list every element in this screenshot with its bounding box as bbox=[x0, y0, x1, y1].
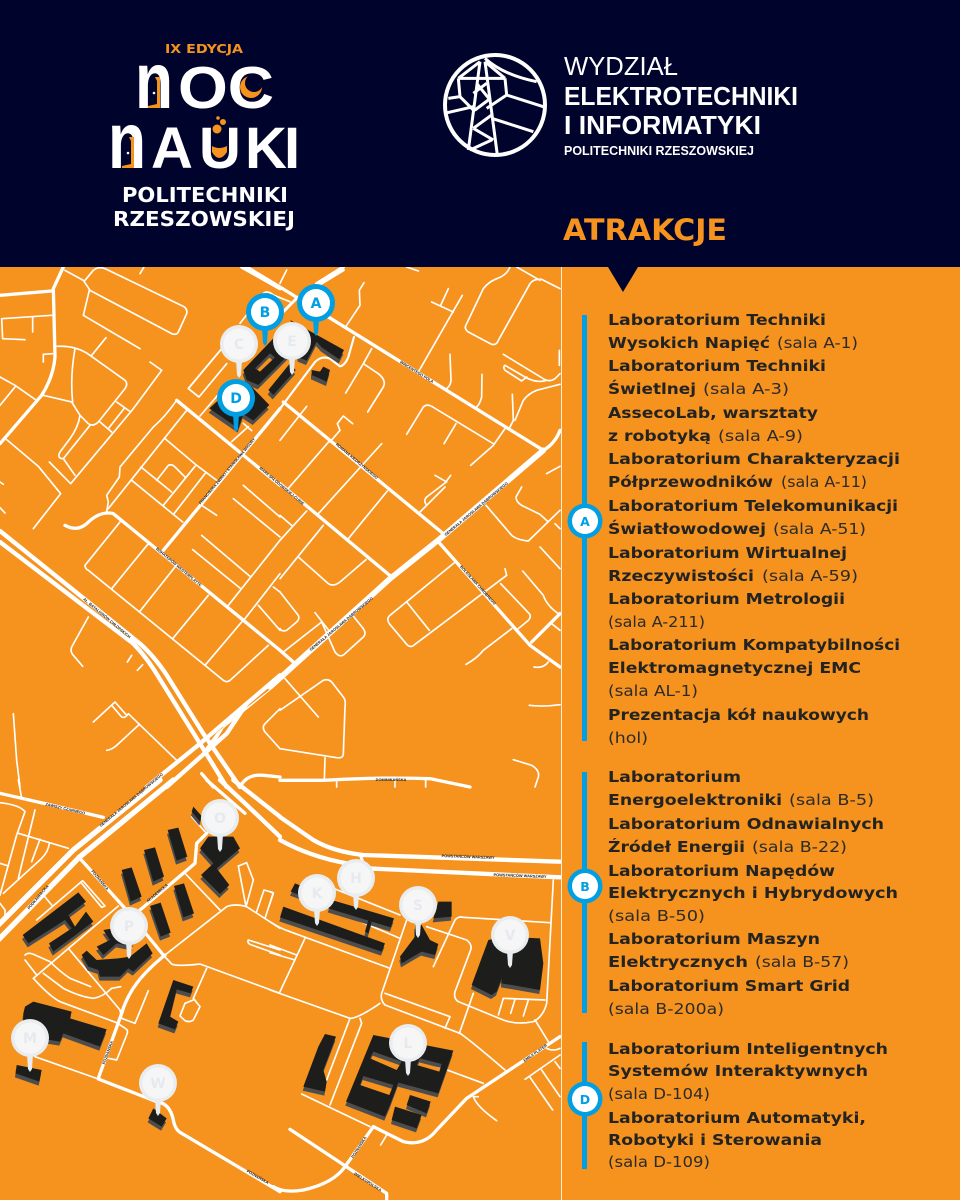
list: building A attractions: (sala A-11) bbox=[781, 473, 867, 491]
list: building A attractions: Laboratorium Techniki bbox=[608, 357, 826, 375]
list: building A attractions: (sala A-51) bbox=[773, 520, 866, 538]
heading: attractions: ATRAKCJE bbox=[563, 213, 727, 247]
map pin: H bbox=[337, 859, 375, 910]
street names: FRANCISZKA ŻWIRKI I STANISŁAWA WIGURY bbox=[198, 436, 256, 505]
street names: GENERAŁA JAROSŁAWA DĄBROWSKIEGO bbox=[443, 481, 509, 537]
list: building A attractions: Światłowodowej bbox=[608, 519, 766, 538]
timeline A bbox=[568, 315, 602, 741]
list: building A attractions: (sala A-9) bbox=[718, 427, 803, 445]
roads: north-east section bbox=[247, 267, 560, 787]
timeline D bbox=[568, 1042, 602, 1169]
icon: power pylon in circle bbox=[445, 55, 545, 155]
list: building A attractions: Laboratorium Telekomunikacji bbox=[608, 497, 898, 515]
list: building B attractions: Laboratorium bbox=[608, 768, 741, 786]
list: building B attractions: (sala B-200a) bbox=[608, 1000, 724, 1018]
street names: GENERAŁA JAROSŁAWA DĄBROWSKIEGO bbox=[308, 596, 374, 652]
map pin: M: M bbox=[23, 1031, 37, 1047]
list: building B attractions: Źródeł Energii bbox=[608, 837, 745, 856]
list: building A attractions: (sala A-211) bbox=[608, 613, 705, 631]
list: building A attractions: z robotyką bbox=[608, 427, 711, 445]
event logo: Noc Nauki: AUKI bbox=[151, 116, 300, 181]
faculty name: POLITECHNIKI RZESZOWSKIEJ bbox=[564, 144, 754, 158]
map pin: P bbox=[110, 907, 148, 959]
event logo: Noc Nauki: n bbox=[108, 96, 146, 185]
map pin: K bbox=[298, 874, 336, 926]
map pin: W bbox=[139, 1064, 177, 1116]
map pin: H: H bbox=[350, 871, 362, 887]
list: building B attractions: Laboratorium Maszyn bbox=[608, 930, 820, 948]
map pin: A bbox=[297, 284, 335, 336]
faculty name bbox=[564, 51, 798, 158]
map pin: M bbox=[11, 1019, 49, 1072]
map pin: L bbox=[389, 1024, 427, 1076]
street names: PODKARPACKA bbox=[26, 884, 50, 910]
list: building A attractions: Półprzewodników bbox=[608, 473, 773, 491]
list: building B attractions: Elektrycznych i Hybrydowych bbox=[608, 884, 898, 902]
street names: ROMANA KIEDRZYŃSKIEGO bbox=[335, 442, 379, 480]
list: building A attractions: Rzeczywistości bbox=[608, 567, 754, 585]
list: building A attractions: Świetlnej bbox=[608, 379, 696, 398]
list: building A attractions bbox=[608, 311, 900, 747]
event logo: Noc Nauki: IX EDYCJA bbox=[165, 41, 243, 56]
street names: BOLESŁAWA CHROBREGO bbox=[459, 564, 497, 606]
list: building B attractions: (sala B-50) bbox=[608, 907, 705, 925]
street names: AKADEMICKA bbox=[145, 882, 169, 903]
street names: ZAWISZY CZARNEGO bbox=[45, 802, 86, 816]
list: building A attractions: (sala A-1) bbox=[777, 334, 858, 352]
map pin: E bbox=[273, 322, 311, 375]
map pin: O bbox=[201, 799, 239, 852]
street names: WIELKOPOLSKA bbox=[353, 1171, 383, 1193]
map pin: O: O bbox=[214, 811, 226, 827]
street names: MARII SKŁODOWSKIEJ-CURIE bbox=[258, 466, 306, 506]
list: building A attractions: Wysokich Napięć bbox=[608, 334, 770, 352]
street names: EMILII PLATER bbox=[522, 1043, 548, 1063]
street names: GENERAŁA JAROSŁAWA DĄBROWSKIEGO bbox=[98, 772, 164, 828]
event logo: Noc Nauki: RZESZOWSKIEJ bbox=[113, 207, 295, 231]
map pin: L: L bbox=[404, 1036, 413, 1052]
vertical divider bbox=[561, 267, 562, 1200]
road junction taper bbox=[203, 690, 270, 752]
map pin: B: B bbox=[260, 305, 270, 321]
list: building B attractions: Laboratorium Smart Grid bbox=[608, 977, 850, 995]
faculty name: ELEKTROTECHNIKI bbox=[564, 81, 798, 111]
buildings: campus A to E bbox=[209, 320, 344, 433]
timeline B bbox=[568, 772, 602, 1013]
faculty name: WYDZIAŁ bbox=[564, 51, 678, 81]
list: building B attractions: (sala B-57) bbox=[755, 953, 849, 971]
list: building D attractions: (sala D-104) bbox=[608, 1085, 710, 1103]
list: building A attractions: Laboratorium Wirtualnej bbox=[608, 544, 847, 562]
street names: POWSTAŃCÓW WARSZAWY bbox=[441, 853, 495, 860]
street names: POZNAŃSKA bbox=[246, 1168, 270, 1185]
event logo: Noc Nauki: POLITECHNIKI bbox=[122, 183, 288, 207]
header band bbox=[0, 0, 960, 267]
list: building A attractions: Laboratorium Metrologii bbox=[608, 590, 845, 608]
event logo: Noc Nauki bbox=[108, 36, 300, 231]
list: building A attractions: Laboratorium Charakteryzacji bbox=[608, 450, 900, 468]
list: building B attractions: Elektrycznych bbox=[608, 953, 748, 971]
list: building D attractions: Laboratorium Inteligentnych bbox=[608, 1040, 888, 1058]
map pin: S: S bbox=[413, 898, 423, 914]
list: building B attractions: (sala B-22) bbox=[752, 838, 847, 856]
list: building A attractions: (sala A-59) bbox=[762, 567, 858, 585]
event logo: Noc Nauki: n bbox=[135, 36, 173, 125]
street names: DOMINIKAŃSKA bbox=[376, 777, 407, 782]
map pin: P: P bbox=[124, 919, 134, 935]
map pin: C: C bbox=[234, 337, 244, 353]
map pin: D bbox=[217, 379, 255, 432]
faculty name: I INFORMATYKI bbox=[564, 110, 761, 140]
list: building D attractions bbox=[608, 1040, 888, 1171]
map bbox=[0, 267, 560, 1200]
street names: AL. BATALIONÓW CHŁOPSKICH bbox=[82, 597, 132, 639]
street names: POWSTAŃCÓW WARSZAWY bbox=[493, 872, 547, 879]
pointer triangle bbox=[608, 267, 638, 292]
street names: POZNAŃSKA bbox=[101, 1040, 114, 1065]
event logo: Noc Nauki: OC bbox=[178, 55, 274, 121]
list: building D attractions: Robotyki i Sterowania bbox=[608, 1131, 822, 1149]
roads: north-west section bbox=[0, 267, 280, 787]
map pin: B bbox=[246, 293, 284, 346]
list: building A attractions: (hol) bbox=[608, 729, 648, 747]
list: building D attractions: Laboratorium Automatyki, bbox=[608, 1109, 866, 1127]
timeline D: D bbox=[580, 1092, 590, 1107]
street names: POZNAŃSKA bbox=[90, 869, 110, 891]
buildings: south-east campus bbox=[279, 883, 543, 1132]
list: building B attractions: Energoelektroniki bbox=[608, 791, 782, 809]
map pin: W: W bbox=[150, 1076, 166, 1092]
street names: BOHATERÓW WESTERPLATTE bbox=[155, 546, 203, 588]
map pin: K: K bbox=[312, 886, 324, 902]
list: building A attractions: Laboratorium Kompatybilności bbox=[608, 636, 900, 654]
buildings: south-west campus bbox=[15, 807, 240, 1131]
roads: south-west section bbox=[0, 780, 280, 1192]
map pin: E: E bbox=[287, 334, 297, 350]
list: building A attractions: (sala AL-1) bbox=[608, 682, 698, 700]
list: building A attractions: AssecoLab, warsztaty bbox=[608, 404, 818, 422]
list: building B attractions bbox=[608, 768, 898, 1018]
map pin: A: A bbox=[311, 296, 322, 312]
list: building B attractions: Laboratorium Napędów bbox=[608, 862, 835, 880]
list: building D attractions: Systemów Interaktywnych bbox=[608, 1062, 868, 1080]
roads: south-east section bbox=[270, 817, 560, 1200]
list: building B attractions: Laboratorium Odnawialnych bbox=[608, 815, 884, 833]
map pin: V: V bbox=[505, 928, 516, 944]
timeline A: A bbox=[580, 514, 590, 529]
roads: around faculty buildings bbox=[188, 270, 343, 442]
street names: WINCENTEGO POLA bbox=[399, 359, 435, 384]
map pin: C bbox=[220, 325, 258, 378]
list: building A attractions: Laboratorium Techniki bbox=[608, 311, 826, 329]
street names: POZNAŃSKA bbox=[350, 1135, 368, 1159]
map pin: V bbox=[491, 916, 529, 968]
list: building A attractions: Prezentacja kół naukowych bbox=[608, 706, 869, 724]
map pin: D: D bbox=[230, 391, 242, 407]
map pin: S bbox=[399, 886, 437, 938]
list: building B attractions: (sala B-5) bbox=[789, 791, 874, 809]
list: building A attractions: Elektromagnetycznej EMC bbox=[608, 659, 861, 677]
timeline B: B bbox=[580, 879, 590, 894]
list: building A attractions: (sala A-3) bbox=[703, 380, 789, 398]
street names bbox=[26, 359, 548, 1193]
list: building D attractions: (sala D-109) bbox=[608, 1153, 710, 1171]
